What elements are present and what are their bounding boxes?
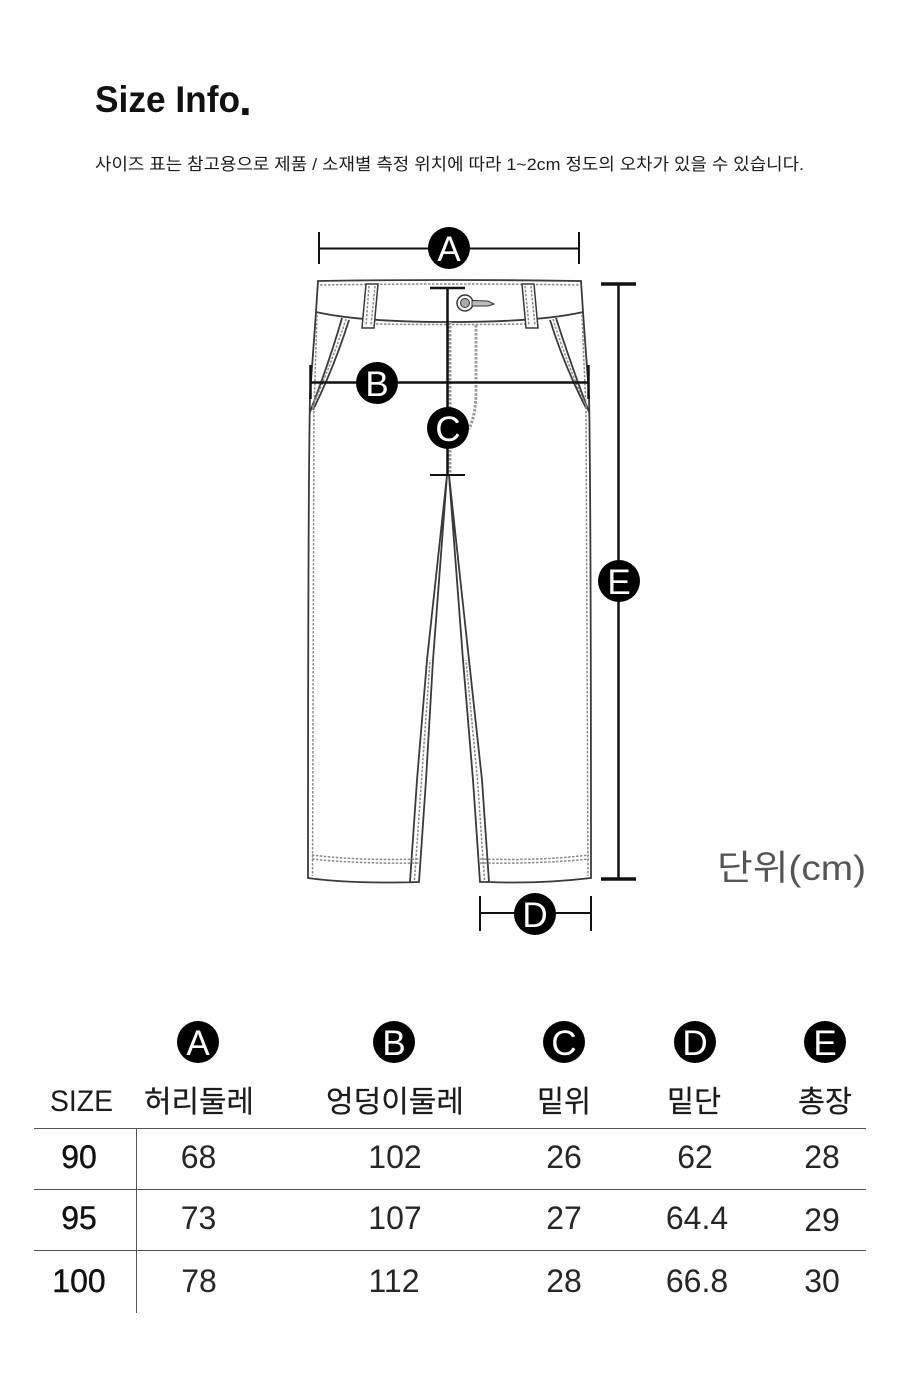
column headers: 밑단 [667, 1086, 721, 1119]
column headers: 총장 [798, 1086, 852, 1119]
subtitle note: 사이즈 표는 참고용으로 제품 / 소재별 측정 위치에 따라 1~2cm 정도의 오차가 있을 수 있습니다. [95, 155, 804, 174]
column badges: B [382, 1024, 406, 1063]
row 100: 112 [368, 1263, 420, 1299]
leg stitching [312, 315, 589, 880]
row 90: 68 [181, 1139, 216, 1175]
measure B: hip: B [365, 365, 389, 404]
row 95: 29 [804, 1202, 840, 1238]
row 95: 64.4 [666, 1200, 728, 1236]
pants technical drawing [308, 280, 591, 882]
column badges: C [551, 1024, 577, 1063]
measure B: hip [310, 362, 589, 404]
row 95: 107 [368, 1200, 422, 1236]
row 95 [61, 1200, 840, 1238]
row 90 [61, 1139, 840, 1175]
column badges: D [682, 1024, 708, 1063]
row 95: 73 [181, 1200, 216, 1236]
column badges: A [186, 1024, 210, 1063]
row 100: 78 [181, 1263, 217, 1299]
row 90: 62 [677, 1139, 713, 1175]
row 90: 28 [804, 1139, 840, 1175]
belt loops [362, 284, 538, 328]
table rules [34, 1128, 866, 1313]
row 100: 30 [804, 1263, 840, 1299]
column headers: 허리둘레 [144, 1086, 254, 1119]
measure D: hem [480, 893, 591, 935]
measure E: total length [598, 284, 640, 879]
fly stitching [450, 322, 476, 475]
column headers: 엉덩이둘레 [326, 1086, 464, 1119]
row 90: 26 [546, 1139, 582, 1175]
unit label: 단위(cm) [717, 849, 866, 888]
column badges: E [813, 1024, 837, 1063]
row 100: 100 [52, 1263, 106, 1299]
waistband [316, 280, 583, 324]
button and buttonhole [457, 295, 494, 311]
row 90: 90 [61, 1139, 97, 1175]
row 95: 27 [546, 1200, 582, 1236]
row 100: 28 [546, 1263, 582, 1299]
column headers [50, 1085, 852, 1119]
row 100: 66.8 [666, 1263, 728, 1299]
measure D: hem: D [522, 896, 548, 935]
row 95: 95 [61, 1200, 97, 1236]
row 90: 102 [368, 1139, 422, 1175]
title: . [239, 73, 252, 125]
column headers: 밑위 [537, 1086, 591, 1119]
title: Size Info [95, 79, 240, 120]
pant legs outline [308, 312, 591, 882]
measure A: waist [319, 227, 579, 269]
measure E: total length: E [607, 563, 631, 602]
measure A: waist: A [437, 230, 461, 269]
column badges [177, 1021, 846, 1063]
row 100 [52, 1263, 840, 1299]
measure C: rise [427, 288, 469, 475]
column headers: SIZE [50, 1085, 113, 1118]
measure C: rise: C [435, 410, 461, 449]
pockets [310, 318, 589, 412]
size table [34, 1021, 866, 1313]
